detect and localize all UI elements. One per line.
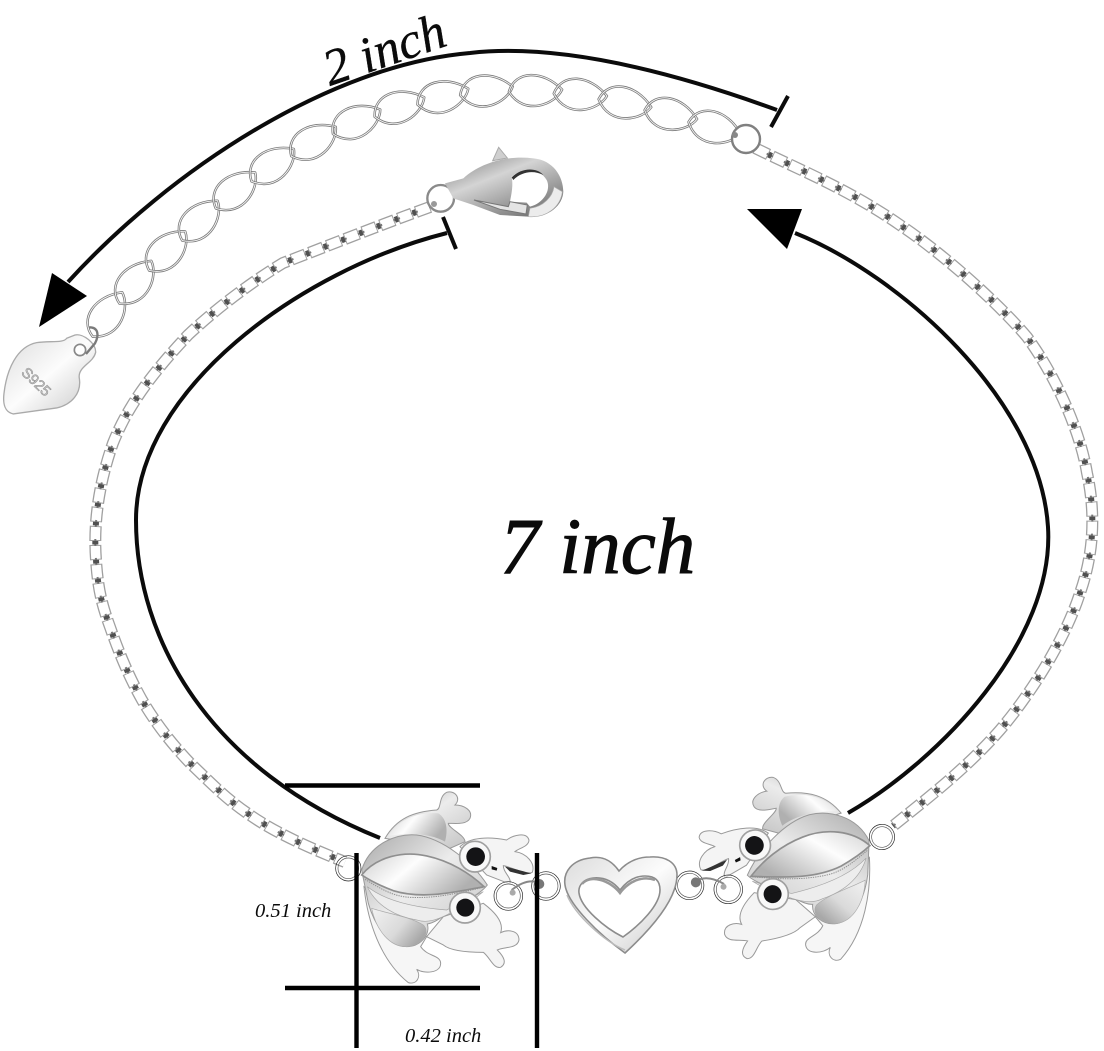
icon: lobster clasp bbox=[427, 147, 563, 217]
label: 7 inch: 7 inch bbox=[500, 504, 695, 591]
chain: small cable links right side bbox=[755, 148, 1092, 826]
pendant: right frog bbox=[661, 760, 912, 983]
arrow: 7 inch arrowhead bbox=[747, 209, 802, 249]
pendant: open heart bbox=[565, 857, 677, 953]
dimension lines: frog height and width bbox=[285, 786, 537, 1048]
icon: heart tag S925: S925 bbox=[18, 365, 53, 400]
measurement curve: 7 inch arc bbox=[136, 217, 1048, 838]
label: 0.42 inch: 0.42 inch bbox=[405, 1025, 481, 1047]
chain: small cable links left side bbox=[95, 207, 430, 862]
arrow: 2 inch arrowhead bbox=[39, 273, 87, 327]
chain: extender links bbox=[79, 74, 760, 345]
measurement curve: 2 inch arc bbox=[68, 51, 788, 282]
label: 2 inch: 2 inch bbox=[316, 3, 453, 97]
pendant: left frog bbox=[336, 792, 560, 983]
icon: heart tag S925 bbox=[4, 327, 97, 414]
label: 0.51 inch: 0.51 inch bbox=[255, 900, 331, 922]
